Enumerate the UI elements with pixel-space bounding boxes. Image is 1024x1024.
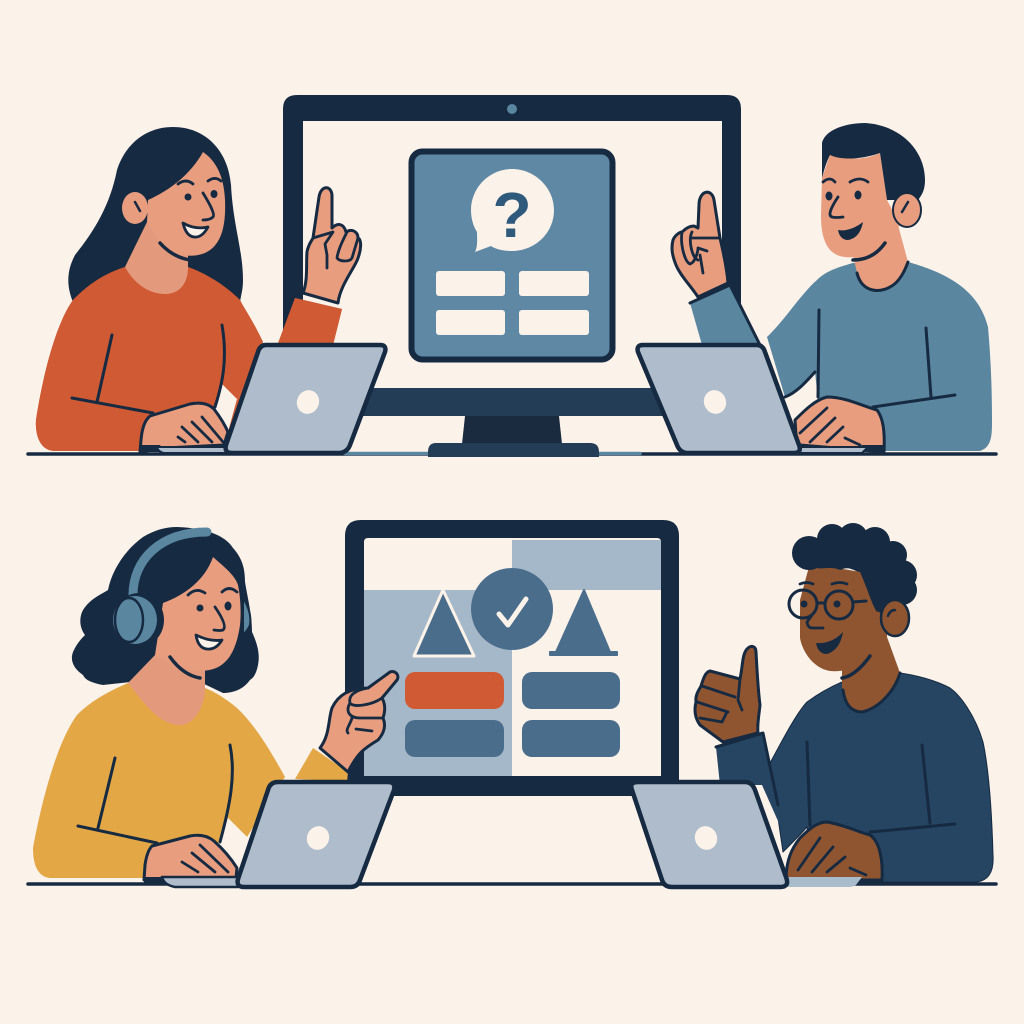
laptop: bottom-right xyxy=(631,782,862,887)
quiz card xyxy=(412,152,612,360)
curly hair xyxy=(792,523,917,615)
answer buttons xyxy=(405,672,620,757)
hand pointing xyxy=(320,672,398,772)
quiz card: ? xyxy=(492,179,532,251)
bottom monitor xyxy=(345,520,679,796)
hand on keyboard xyxy=(144,835,237,885)
hand pointing xyxy=(303,188,361,303)
hand on keyboard xyxy=(140,403,228,452)
laptop: top-left xyxy=(157,345,385,453)
check badge xyxy=(471,568,553,650)
hand on keyboard xyxy=(795,397,885,452)
laptop: bottom-left xyxy=(162,782,394,887)
headphones xyxy=(113,532,250,647)
hand on keyboard xyxy=(786,822,882,880)
glasses xyxy=(789,590,866,619)
triangle right xyxy=(550,590,617,655)
person: top-left woman xyxy=(36,127,361,452)
top monitor xyxy=(283,95,741,457)
person: top-right man xyxy=(672,123,992,452)
triangle left xyxy=(414,590,474,656)
hand pointing xyxy=(672,192,728,297)
person: bottom-right man xyxy=(695,523,993,882)
hand thumbs up xyxy=(695,646,760,742)
laptop: top-right xyxy=(638,345,868,453)
top desk line xyxy=(28,452,996,456)
person: bottom-left woman xyxy=(33,527,398,885)
bottom desk line xyxy=(28,882,996,886)
